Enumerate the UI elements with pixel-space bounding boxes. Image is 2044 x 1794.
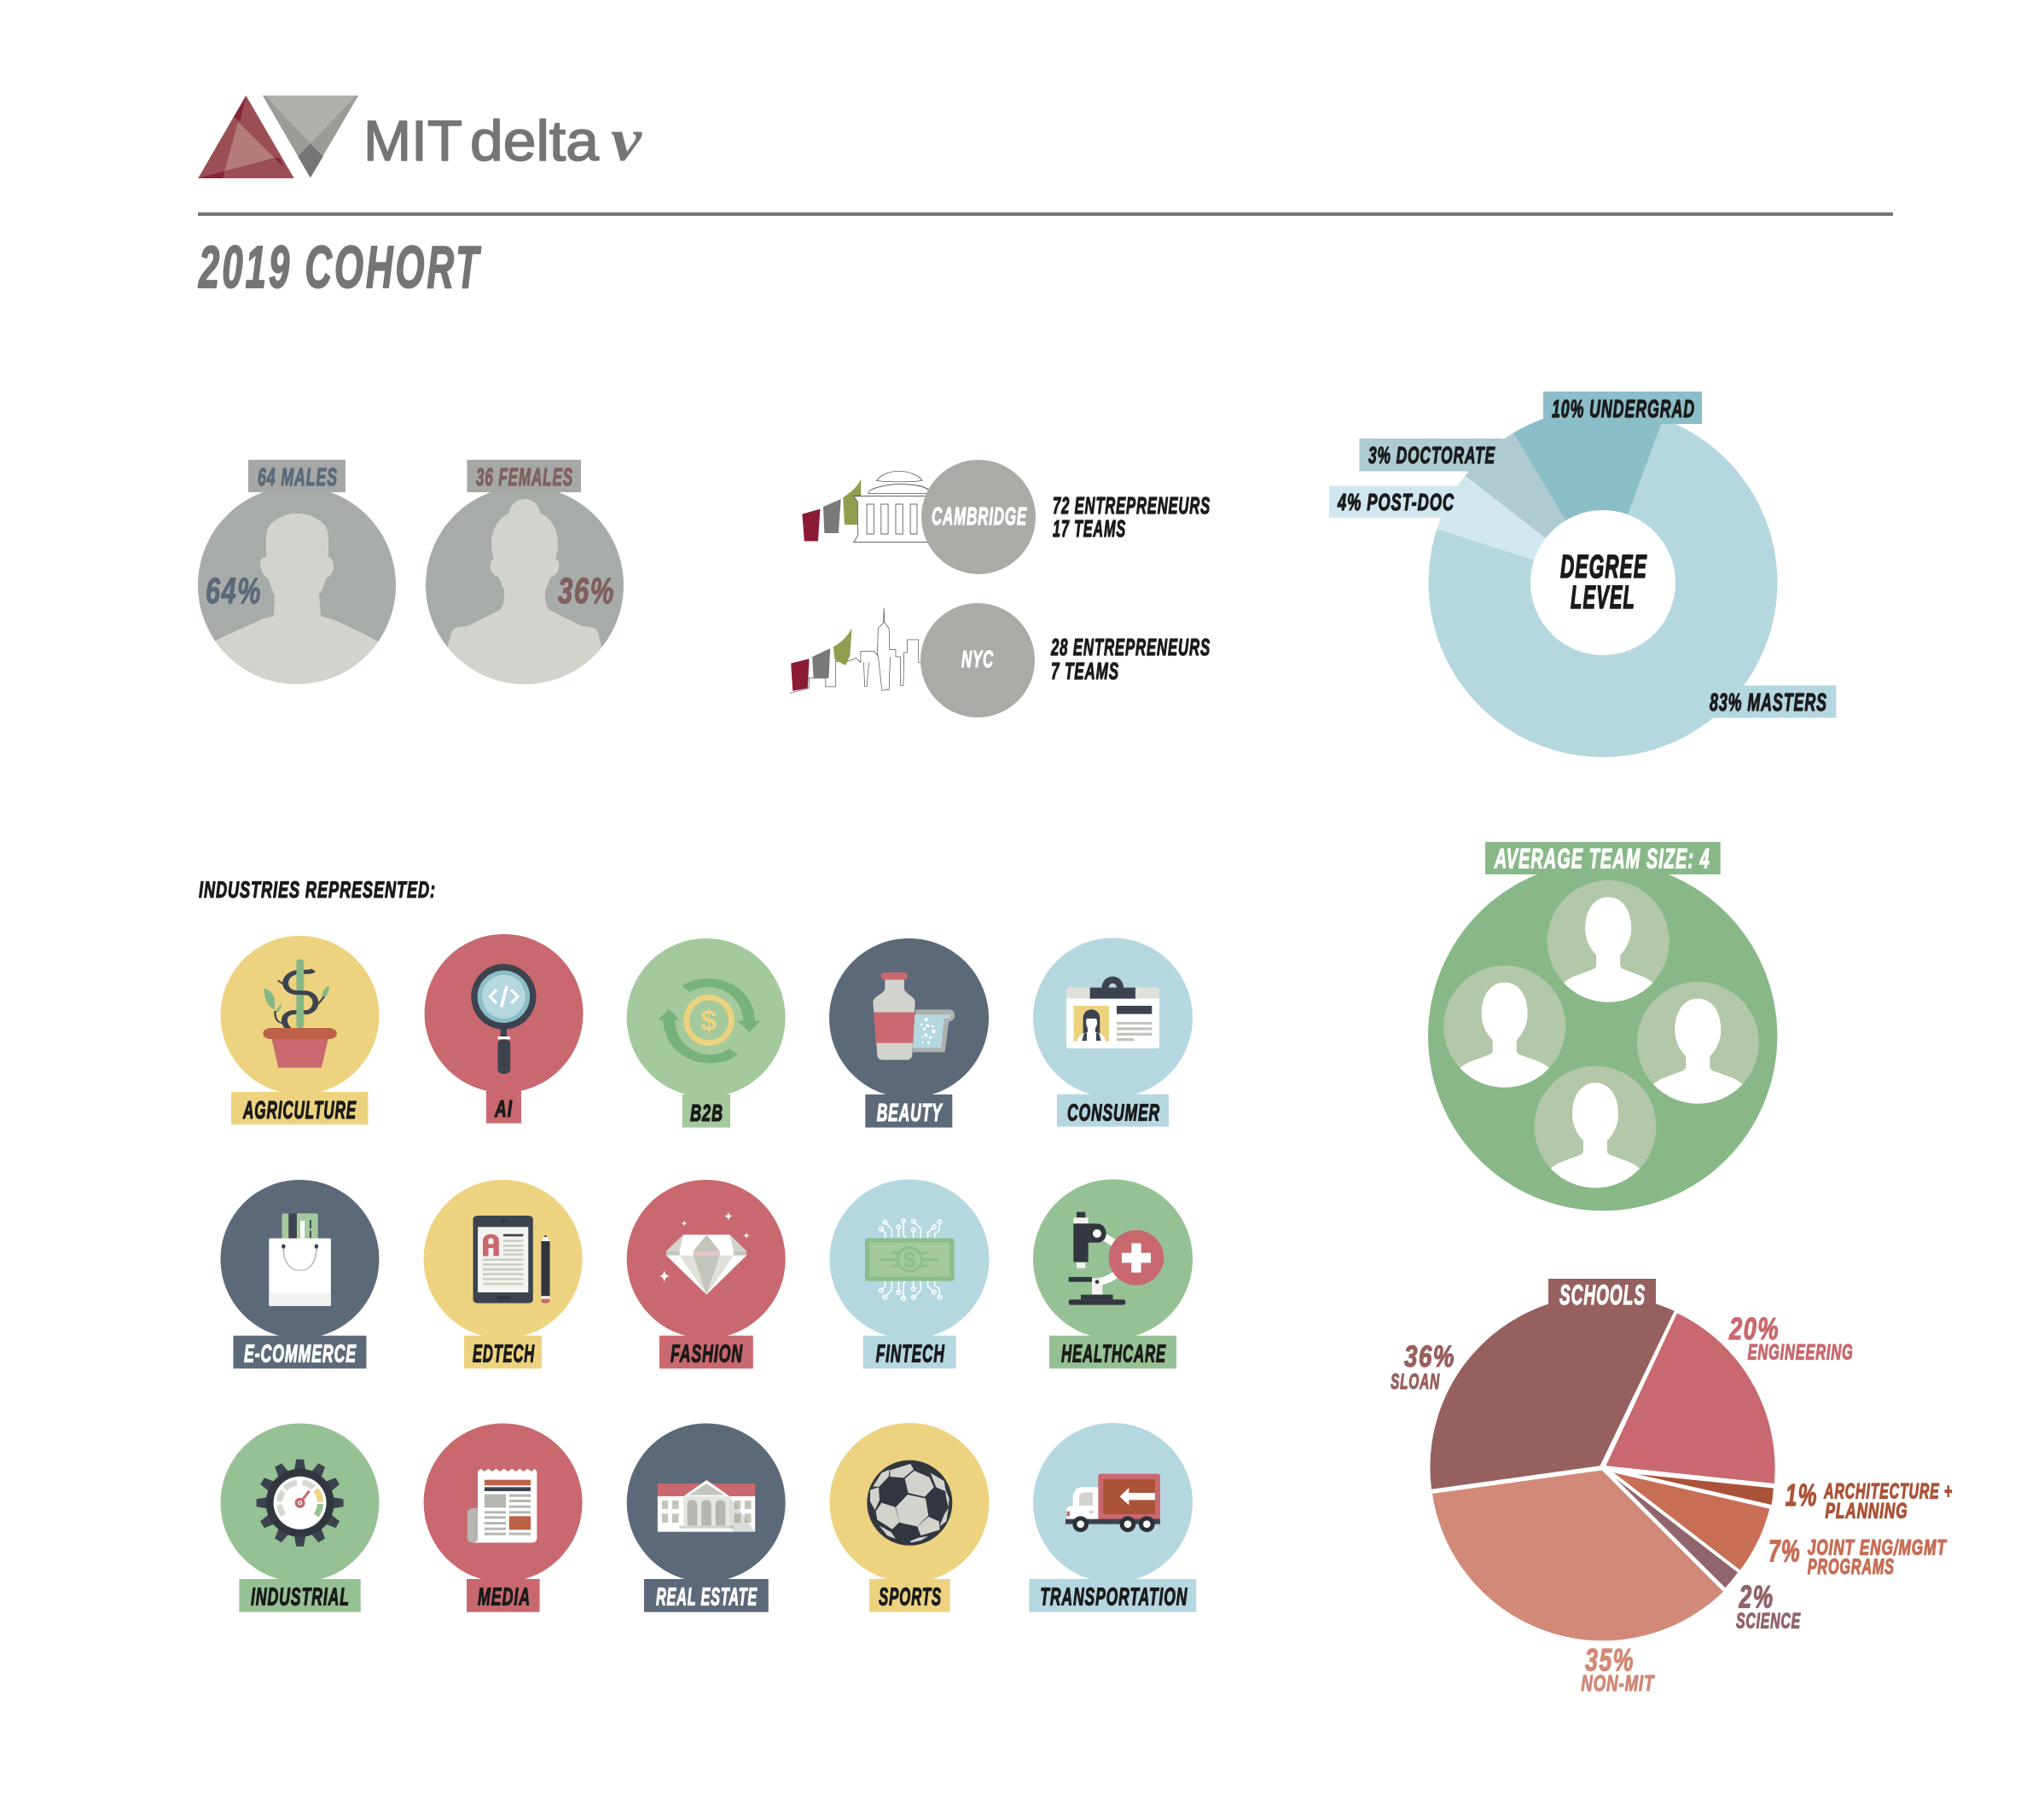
icon: diamond [659,1211,750,1295]
label: ai: AI [494,1095,513,1122]
donut centre label: DEGREE [1560,549,1647,585]
label: agriculture [231,1092,369,1124]
slice: non-mit 35% [1432,1471,1723,1640]
label: transportation: TRANSPORTATION [1040,1584,1187,1611]
label: undergrad: 10% UNDERGRAD [1552,396,1695,423]
label: industrial [239,1579,361,1612]
male figure: 64 MALES [258,464,338,491]
panel: consumer [1033,938,1193,1127]
label: edtech [464,1336,542,1368]
panel: gender [198,460,624,691]
nyc stats: 28 ENTREPRENEURS [1050,634,1211,660]
icon: shopping bag [269,1213,331,1306]
panel: cambridge: CAMBRIDGE [932,503,1027,531]
label: post-doc [1329,486,1460,518]
icon: building [658,1480,755,1532]
cambridge stats: 72 ENTREPRENEURS [1053,492,1211,519]
label: ai [486,1091,521,1123]
panel: beauty [829,938,989,1128]
panel: agriculture [220,936,379,1124]
male figure [198,460,396,691]
female figure: 36% [558,571,615,612]
panel: industrial [220,1423,379,1612]
label: fintech: FINTECH [876,1341,945,1368]
label: post-doc: 4% POST-DOC [1337,489,1455,515]
label: consumer: CONSUMER [1067,1099,1160,1125]
label: real estate: REAL ESTATE [656,1584,758,1611]
icon: magnifying glass [471,964,536,1074]
label: science [1736,1580,1801,1634]
logo: MIT delta v [198,96,642,178]
label: media [467,1579,540,1612]
label: sloan: SLOAN [1391,1370,1440,1394]
cambridge stats [1053,492,1211,542]
panel: fintech [829,1179,990,1368]
cambridge circle [921,460,1036,574]
label: doctorate: 3% DOCTORATE [1368,442,1495,468]
label: average team size: AVERAGE TEAM SIZE: 4 [1494,843,1710,874]
label: schools [1548,1279,1656,1310]
label: agriculture: AGRICULTURE [242,1097,357,1124]
female figure [426,460,624,691]
team member: top [1548,880,1669,1009]
icon: bottle and jar [873,972,955,1060]
icon: plant [263,959,337,1068]
label: joint programs: 7% [1768,1534,1801,1568]
panel: edtech [424,1180,583,1368]
label: industrial: INDUSTRIAL [251,1584,350,1611]
icon: coin with arrows [659,983,760,1059]
label: doctorate [1360,438,1503,471]
icon: id badge [1066,977,1159,1048]
label: non-mit [1581,1643,1655,1696]
label: sports [869,1579,950,1612]
female figure: 36 FEMALES [476,464,573,491]
panel: b2b [627,938,786,1128]
logo wordmark: delta [470,109,600,173]
nyc circle [920,603,1035,717]
icon: soccer ball [867,1460,952,1546]
label: joint programs: PROGRAMS [1808,1555,1895,1579]
panel: nyc [790,603,1211,717]
cambridge stats: 17 TEAMS [1053,515,1126,542]
panel: ai [425,934,584,1123]
label: architecture and planning [1786,1478,1953,1524]
icon: NYC skyline with flags [790,608,921,694]
slice: doctorate [1466,433,1603,583]
label: healthcare: HEALTHCARE [1061,1341,1166,1368]
panel: sports [829,1423,990,1612]
panel: nyc: NYC [961,646,994,672]
label: masters [1706,686,1836,718]
panel: transportation [1029,1423,1196,1612]
label: architecture and planning: PLANNING [1826,1500,1908,1524]
label: sloan: 36% [1404,1340,1455,1373]
donut centre label [1560,549,1647,616]
label: fintech [863,1336,956,1368]
label: masters: 83% MASTERS [1710,689,1827,717]
donut centre label: LEVEL [1571,580,1635,616]
nyc stats [1050,634,1211,684]
label: real estate [644,1579,769,1612]
icon: digital banknote: $ [903,1247,916,1273]
label: b2b: B2B [690,1100,723,1126]
panel: cambridge [802,460,1211,574]
panel: media [424,1423,583,1612]
heading: industries represented: INDUSTRIES REPRESENTED: [199,877,436,903]
label: non-mit: 35% [1585,1643,1635,1678]
label: healthcare [1049,1336,1176,1368]
panel: e-commerce [220,1180,379,1368]
nyc stats: 7 TEAMS [1051,658,1119,684]
label: undergrad [1543,392,1702,424]
logo wordmark [363,106,642,174]
label: beauty [865,1094,952,1128]
label: science: SCIENCE [1736,1610,1801,1634]
label: architecture and planning: ARCHITECTURE + [1823,1479,1953,1503]
icon: gear gauge [257,1460,344,1547]
logo wordmark: MIT [363,109,462,173]
panel: fashion [627,1180,786,1368]
icon: microscope and cross [1069,1212,1164,1305]
team member: right [1637,982,1759,1111]
icon: coin with arrows: $ [701,1005,717,1037]
label: joint programs [1768,1534,1948,1579]
slice: joint programs 7% [1614,1472,1769,1570]
label: engineering: 20% [1728,1311,1780,1346]
label: fashion: FASHION [671,1341,743,1368]
slice: architecture 1% [1637,1474,1774,1505]
panel: healthcare [1033,1179,1193,1368]
label: e-commerce [234,1336,367,1368]
label: edtech: EDTECH [473,1341,535,1368]
panel: real estate [627,1423,786,1612]
slice: engineering 20% [1606,1313,1775,1483]
slice: sloan 36% [1430,1295,1675,1489]
male figure: 64% [206,571,262,612]
icon: delivery truck [1066,1474,1160,1532]
icon: MIT dome with flags [802,471,931,543]
label: science: 2% [1739,1580,1774,1615]
icon: logo triangles [198,96,358,178]
label: b2b [682,1094,730,1128]
label: sloan [1391,1340,1455,1394]
label: architecture and planning: 1% [1786,1478,1818,1512]
label: media: MEDIA [478,1584,531,1611]
label: e-commerce: E-COMMERCE [244,1341,357,1368]
team member: bottom [1534,1066,1657,1195]
label: average team size [1485,842,1721,874]
team member: left [1443,966,1565,1094]
label: non-mit: NON-MIT [1581,1670,1655,1696]
icon: tablet and pencil [473,1216,550,1303]
label: joint programs: JOINT ENG/MGMT [1808,1536,1948,1560]
slice: post-doc [1437,476,1603,583]
slice: undergrad [1513,409,1663,583]
panel: schools pie chart [1391,1279,1953,1696]
logo wordmark: v [611,106,642,174]
label: engineering: ENGINEERING [1748,1341,1854,1365]
title: 2019 COHORT [198,234,481,300]
label: schools: SCHOOLS [1559,1280,1646,1310]
slice: science 2% [1616,1478,1738,1588]
icon: digital banknote [865,1219,955,1301]
label: sports: SPORTS [879,1584,942,1611]
panel: average team size [1428,842,1777,1211]
label: fashion [659,1336,753,1368]
label: beauty: BEAUTY [877,1100,943,1127]
label: transportation [1029,1579,1196,1612]
icon: newspaper [467,1469,537,1542]
label: consumer [1057,1094,1169,1127]
panel: degree level donut chart [1329,392,1836,758]
label: engineering [1728,1311,1854,1365]
